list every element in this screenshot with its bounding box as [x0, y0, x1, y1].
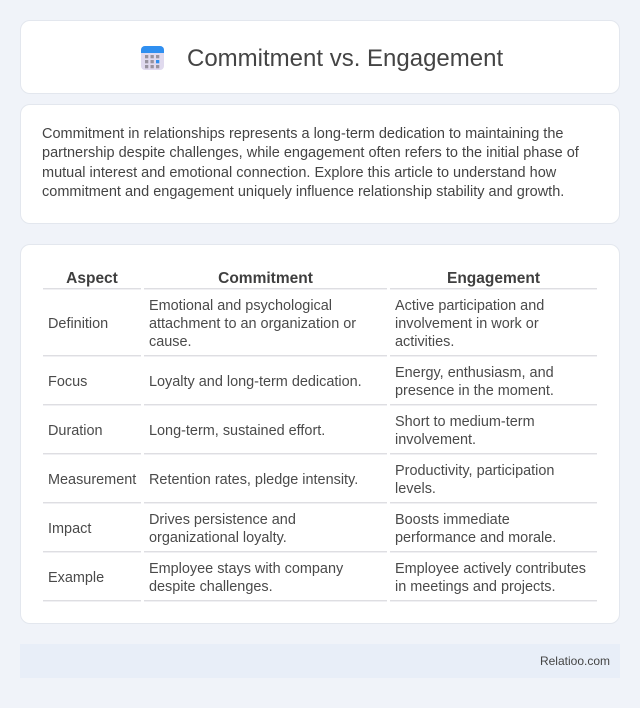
comparison table: Retention rates, pledge intensity. [149, 472, 358, 488]
intro text: commitment and engagement uniquely influence relationship stability and growth. [42, 184, 564, 200]
comparison table: Emotional and psychological [149, 298, 332, 314]
comparison table: presence in the moment. [395, 383, 554, 399]
title: Commitment vs. Engagement [187, 45, 503, 72]
comparison table: organizational loyalty. [149, 530, 287, 546]
comparison table: despite challenges. [149, 579, 273, 595]
comparison table: performance and morale. [395, 530, 556, 546]
comparison table: involvement. [395, 432, 476, 448]
comparison table: Employee actively contributes [395, 561, 586, 577]
comparison table: Duration [48, 423, 103, 439]
comparison table: involvement in work or [395, 316, 539, 332]
comparison table: Example [48, 570, 104, 586]
comparison table: Boosts immediate [395, 512, 510, 528]
comparison table: Engagement [447, 270, 540, 287]
comparison table: Short to medium-term [395, 414, 535, 430]
comparison table: Active participation and [395, 298, 544, 314]
comparison table: Long-term, sustained effort. [149, 423, 325, 439]
table card [20, 244, 620, 624]
footer credit: Relatioo.com [540, 654, 610, 668]
comparison table: Productivity, participation [395, 463, 554, 479]
intro text: partnership despite challenges, while engagement often refers to the initial phase of [42, 145, 579, 161]
comparison table: Loyalty and long-term dedication. [149, 374, 362, 390]
comparison table: activities. [395, 334, 454, 350]
comparison table: Commitment [218, 270, 313, 287]
comparison table: Measurement [48, 472, 136, 488]
footer bar [20, 644, 620, 678]
icon: calendar [141, 46, 164, 70]
comparison table: attachment to an organization or [149, 316, 356, 332]
intro text: Commitment in relationships represents a long-term dedication to maintaining the [42, 126, 563, 142]
comparison table: Impact [48, 521, 91, 537]
comparison table: levels. [395, 481, 436, 497]
comparison table: Definition [48, 316, 108, 332]
intro card [20, 104, 620, 224]
intro text [42, 126, 579, 200]
comparison table: cause. [149, 334, 192, 350]
comparison table: Employee stays with company [149, 561, 343, 577]
comparison table: Drives persistence and [149, 512, 296, 528]
comparison table: Energy, enthusiasm, and [395, 365, 554, 381]
comparison table: Focus [48, 374, 87, 390]
comparison table: Aspect [66, 270, 118, 287]
title card [20, 20, 620, 94]
intro text: mutual interest and emotional connection. Explore this article to understand how [42, 165, 556, 181]
comparison table: in meetings and projects. [395, 579, 556, 595]
